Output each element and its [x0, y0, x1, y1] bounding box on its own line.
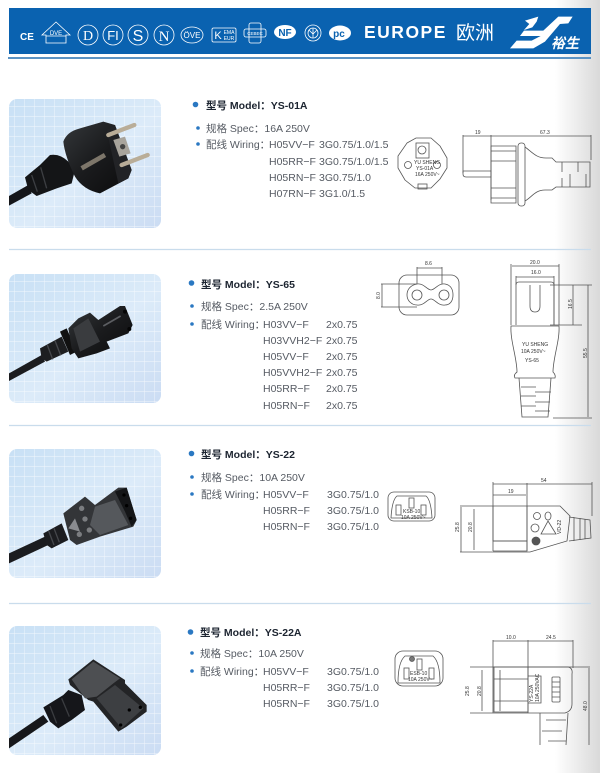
diagram: angled connector side: YS-22A [529, 684, 535, 702]
diagram: angled connector side: 10.0 [506, 635, 516, 641]
diagram: C7 connector side: 10A 250V~ [521, 349, 546, 355]
specification list: 规格 Spec：16A 250V [206, 122, 310, 135]
heading: region Chinese: 欧洲 [456, 22, 494, 44]
panel: YS-22 [9, 448, 592, 578]
icon: VDE [42, 22, 70, 43]
specification list: 2x0.75 [326, 319, 358, 331]
specification list: 规格 Spec：10A 250V [200, 647, 304, 660]
diagram: angled connector side: 25.8 [465, 686, 471, 696]
model title: 型号 Model：YS-65 [201, 278, 295, 291]
specification list: 2x0.75 [326, 351, 358, 363]
diagram: angled connector side: 10A 250VAC [535, 673, 541, 702]
diagram: plug side view: 19 [475, 130, 481, 136]
diagram: C7 connector side: 16.0 [531, 270, 541, 276]
model title: 型号 Model：YS-22 [201, 448, 295, 461]
specification list: H05RN−F [263, 521, 310, 533]
diagram: C13 connector side: 25.8 [455, 522, 461, 532]
icon: CE mark: CE [20, 32, 34, 43]
icon: D mark: D [83, 29, 93, 44]
icon: OVE mark: ÖVE [184, 31, 200, 40]
specification list: H05RN−F [269, 172, 316, 184]
diagram: angled connector side: 24.5 [546, 635, 556, 641]
specification list: 配线 Wiring： [200, 665, 264, 678]
diagram: C7 connector side: 16.5 [568, 299, 574, 309]
specification list: 3G0.75/1.0 [327, 682, 379, 694]
specification list: 3G0.75/1.0 [327, 505, 379, 517]
panel: YS-01A [9, 99, 591, 228]
diagram: plug face: YU SHENG [414, 160, 440, 166]
diagram: C7 socket face [376, 261, 459, 315]
diagram: C7 connector side: YU SHENG [522, 342, 548, 348]
icon: VDE: DVE [50, 31, 62, 37]
specification list: 3G0.75/1.0 [319, 172, 371, 184]
specification list: 规格 Spec：2.5A 250V [201, 300, 308, 313]
specification list: 规格 Spec：10A 250V [201, 471, 305, 484]
specification list: 3G0.75/1.0 [327, 489, 379, 501]
specification list: 3G1.0/1.5 [319, 188, 365, 200]
specification list: H05RR−F [263, 505, 310, 517]
diagram: C7 socket face: 8.6 [425, 261, 432, 267]
panel: YS-65 [9, 260, 592, 418]
specification list: H05RR−F [269, 156, 316, 168]
specification list: H05VV−F [269, 139, 315, 151]
icon: PC mark [329, 26, 351, 40]
heading: region: EUROPE [364, 22, 447, 42]
diagram: angled socket face [395, 651, 443, 686]
icon: CEBEC mark [244, 23, 266, 43]
icon: S mark [128, 25, 148, 45]
specification list: H05RR−F [263, 682, 310, 694]
diagram: angled connector side [465, 635, 590, 745]
header banner [8, 8, 591, 59]
icon: CEBEC mark: CEBEC [247, 31, 263, 36]
specification list: 配线 Wiring： [201, 488, 265, 501]
specification list [190, 647, 379, 710]
logo: 裕生 [551, 35, 580, 51]
specification list: H05RR−F [263, 383, 310, 395]
specification list: H05VV−F [263, 489, 309, 501]
icon: NF mark [274, 25, 296, 39]
specification list [190, 471, 379, 533]
icon: CCC mark [305, 25, 321, 41]
diagram: C7 connector side: 55.5 [583, 348, 589, 358]
divider lines [9, 250, 591, 604]
specification list: 3G0.75/1.0/1.5 [319, 139, 389, 151]
specification list [190, 300, 358, 412]
specification list: H05VV−F [263, 666, 309, 678]
icon: N mark [154, 25, 174, 45]
diagram: C13 connector side: 19 [508, 489, 514, 495]
diagram: plug side view [463, 130, 591, 206]
diagram: angled connector side: 20.8 [477, 686, 483, 696]
diagram: C13 connector side: 20.8 [468, 522, 474, 532]
diagram: C7 socket face: 8.0 [376, 292, 382, 299]
model title: 型号 Model：YS-22A [200, 626, 302, 639]
diagram: C13 socket face: 10A 250V~ [401, 515, 426, 521]
diagram: C7 connector side [511, 260, 592, 418]
specification list: H05VVH2−F [263, 367, 322, 379]
specification list: 2x0.75 [326, 335, 358, 347]
photo: C13 connector [9, 449, 161, 578]
icon: N mark: N [159, 29, 170, 45]
specification list: 3G0.75/1.0 [327, 666, 379, 678]
diagram: plug side view: 67.3 [540, 130, 550, 136]
specification list [196, 122, 389, 200]
photo: angled C13 connector [9, 626, 161, 755]
diagram: plug face [398, 138, 447, 189]
diagram: C13 connector side [455, 478, 592, 552]
icon: S mark: S [133, 28, 143, 45]
photo: Schuko plug [9, 99, 161, 228]
diagram: C13 socket face: KSB-10 [403, 509, 420, 515]
icon: KEMA mark: EUR [224, 36, 235, 42]
model title: 型号 Model：YS-01A [206, 99, 308, 112]
specification list: 配线 Wiring： [201, 318, 265, 331]
diagram: angled connector side: 48.0 [583, 701, 589, 711]
icon: FI mark [103, 25, 123, 45]
icon: OVE mark [181, 27, 203, 43]
specification list: H05RN−F [263, 400, 310, 412]
specification list: 3G0.75/1.0 [327, 521, 379, 533]
diagram: angled socket face: 10A 250V~ [408, 677, 433, 683]
diagram: plug face: YS-01A [416, 166, 434, 172]
icon: KEMA mark: EMA [224, 30, 235, 36]
diagram: C7 connector side: 20.0 [530, 260, 540, 266]
diagram: plug face: 16A 250V~ [415, 172, 440, 178]
panel: YS-22A [9, 626, 590, 755]
specification list: 2x0.75 [326, 367, 358, 379]
specification list: H05RN−F [263, 698, 310, 710]
specification list: H03VVH2−F [263, 335, 322, 347]
icon: KEMA mark: K [214, 30, 222, 42]
icon: D mark [78, 25, 98, 45]
icon: NF mark: NF [278, 28, 292, 39]
icon: FI mark: FI [107, 28, 119, 43]
specification list: 2x0.75 [326, 400, 358, 412]
photo: C7 connector [9, 274, 161, 403]
diagram: angled socket face: ESB-10 [410, 671, 427, 677]
specification list: 2x0.75 [326, 383, 358, 395]
icon: KEMA mark [212, 28, 236, 42]
specification list: 3G0.75/1.0 [327, 698, 379, 710]
logo [510, 17, 580, 51]
specification list: 配线 Wiring： [206, 138, 270, 151]
icon: PC mark: pc [333, 29, 345, 40]
diagram: C13 connector side: VD-22 [557, 520, 563, 534]
specification list: H05VV−F [263, 351, 309, 363]
specification list: 3G0.75/1.0/1.5 [319, 156, 389, 168]
diagram: C13 connector side: 54 [541, 478, 547, 484]
specification list: H07RN−F [269, 188, 316, 200]
diagram: C13 socket face [388, 492, 435, 521]
specification list: H03VV−F [263, 319, 309, 331]
diagram: C7 connector side: YS-65 [525, 358, 539, 364]
